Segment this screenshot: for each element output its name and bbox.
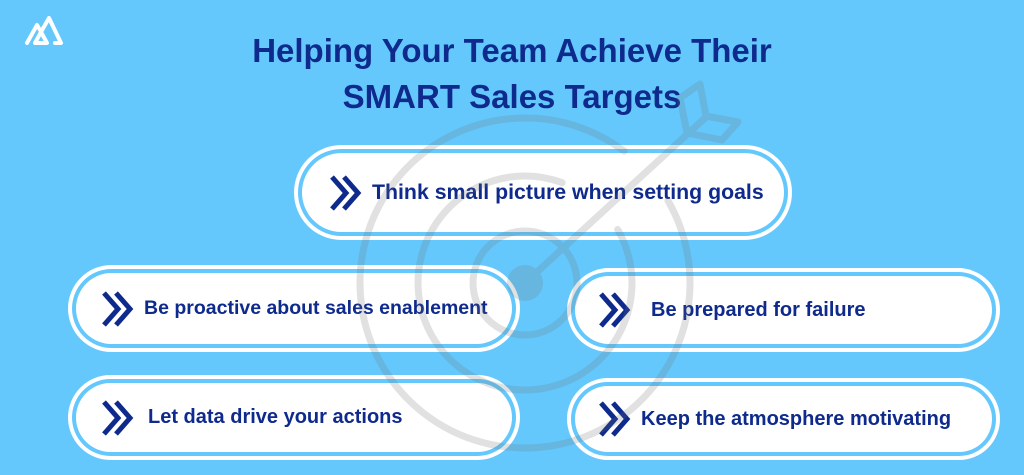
pill: think small picture xyxy=(294,145,792,240)
logo xyxy=(24,16,64,46)
pill: keep atmosphere xyxy=(567,378,1000,460)
title: Helping Your Team Achieve Their xyxy=(252,32,772,69)
pill: be proactive: Be proactive about sales enablement xyxy=(144,297,488,319)
pill: let data drive xyxy=(68,375,520,460)
pill: be prepared xyxy=(567,268,1000,352)
title xyxy=(252,32,772,115)
title: SMART Sales Targets xyxy=(343,78,681,115)
pill: think small picture: Think small picture when setting goals xyxy=(372,180,764,204)
pill: let data drive: Let data drive your actions xyxy=(148,406,403,428)
pill: be proactive xyxy=(68,265,520,352)
pill: keep atmosphere: Keep the atmosphere motivating xyxy=(641,408,951,430)
pill: be prepared: Be prepared for failure xyxy=(651,298,866,320)
